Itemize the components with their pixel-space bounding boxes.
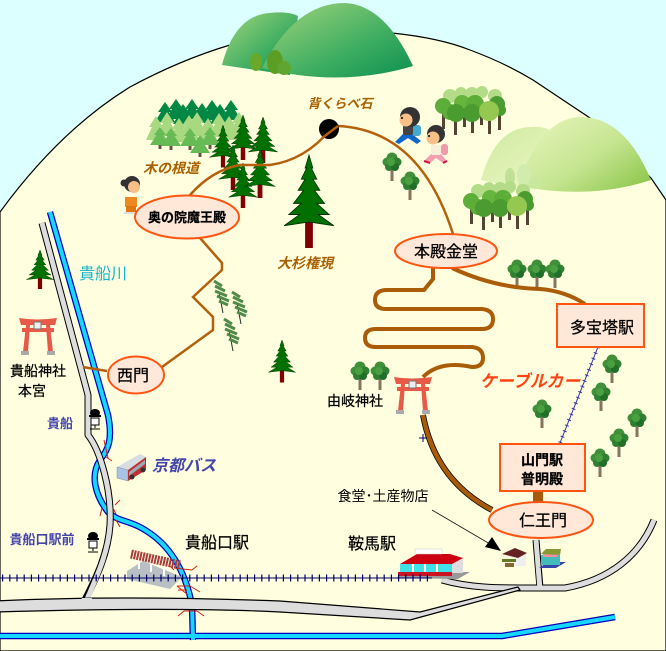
trail: to Tahoto station (452, 268, 585, 304)
tree group upper right (435, 86, 506, 135)
hiker: girl (424, 125, 448, 163)
bus stop: Kibune (89, 409, 101, 429)
label: cable car: ケーブルカー (480, 372, 581, 391)
hiker: child (120, 176, 140, 214)
label: Kibune bus stop: 貴船 (47, 416, 73, 431)
cable car slope (419, 415, 543, 510)
box: Sanmon station: 山門駅 (521, 452, 563, 468)
roads (0, 223, 654, 620)
oval: Honden (395, 234, 497, 268)
bamboo trees (214, 281, 247, 351)
arrow to shops (432, 510, 501, 551)
stone (319, 119, 339, 139)
mountain: top (222, 3, 413, 78)
label: Kyoto Bus: 京都バス (152, 457, 217, 475)
torii: Kibune (19, 318, 57, 355)
mountain: right (481, 117, 651, 192)
label: Kibune shrine: 貴船神社 (10, 363, 66, 379)
label: Kurama station: 鞍馬駅 (348, 535, 396, 553)
trail: upper (190, 126, 453, 234)
firs (209, 115, 278, 208)
label: Kibune river: 貴船川 (79, 265, 127, 283)
bus stop: Kibuneguchi (87, 532, 99, 552)
bridges (100, 440, 204, 616)
label: Seikurabe stone: 背くらべ石 (307, 96, 374, 111)
oval: Honden: 本殿金堂 (414, 243, 478, 261)
oval: Nishimon (108, 356, 164, 394)
label: Yuki shrine: 由岐神社 (327, 393, 383, 409)
box: Sanmon station: 普明殿 (521, 471, 563, 487)
shop: restaurant (502, 548, 527, 567)
tree group lower right (463, 181, 534, 230)
trail: lower (83, 238, 222, 371)
fir tree: great cedar (284, 155, 334, 248)
Kibuneguchi station (127, 554, 182, 589)
fir tree: centre (268, 340, 296, 382)
label: Kibuneguchi-ekimae: 貴船口駅前 (9, 532, 75, 547)
fir tree: left (26, 250, 54, 289)
box: Sanmon station (500, 444, 585, 491)
oval: Okunoin: 奥の院魔王殿 (148, 210, 226, 225)
shop: souvenir (539, 549, 566, 568)
label: Ki-no-ne road: 木の根道 (143, 160, 201, 176)
label: Osugi Gongen: 大杉権現 (277, 255, 335, 271)
trail: switchback (365, 268, 493, 377)
railway (0, 577, 432, 579)
oval: Nishimon: 西門 (117, 368, 149, 385)
label: Kibuneguchi station: 貴船口駅 (185, 534, 249, 552)
fir forest (146, 99, 249, 157)
oval: Niomon (489, 502, 593, 538)
oval: Niomon: 仁王門 (519, 512, 567, 530)
oval: Okunoin (135, 196, 239, 238)
label: restaurants and souvenirs: 食堂･土産物店 (338, 488, 428, 504)
hiker: boy (395, 107, 421, 144)
label: Kibune shrine: 本宮 (18, 383, 46, 399)
label: Kibune shrine (10, 363, 66, 399)
torii: Yuki (394, 377, 432, 414)
cable line (560, 347, 598, 443)
bus (117, 454, 146, 481)
round trees (350, 152, 646, 477)
Kurama station (395, 549, 470, 579)
river (0, 212, 615, 640)
box: Tahoto station: 多宝塔駅 (570, 319, 634, 337)
box: Tahoto station (557, 304, 644, 347)
